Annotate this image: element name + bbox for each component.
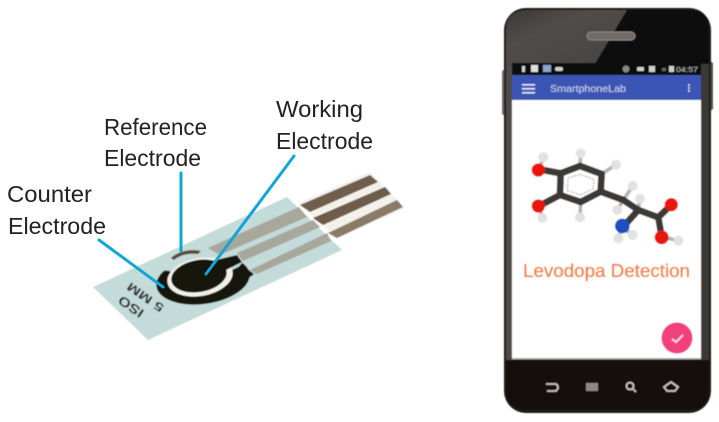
status bar — [512, 63, 701, 75]
electrode strip — [93, 172, 405, 340]
electrode contact tabs — [298, 172, 405, 238]
working electrode arm — [216, 255, 242, 272]
bottom bezel — [506, 360, 709, 410]
printed strip marks — [115, 279, 167, 321]
nav icon: search — [626, 382, 636, 392]
label: counter electrode second line: Electrode — [8, 213, 106, 239]
counter electrode arm — [232, 268, 254, 288]
pointer lines — [99, 156, 294, 287]
screen — [512, 100, 701, 359]
counter electrode ring — [156, 262, 250, 306]
pointer: counter — [99, 240, 163, 287]
levodopa molecule — [532, 148, 683, 246]
hydrogen bonds — [539, 153, 678, 241]
app title: SmartphoneLab — [550, 83, 626, 95]
speaker — [587, 32, 635, 40]
label: working electrode: Working — [276, 96, 363, 122]
nav icon: back — [546, 384, 558, 391]
hydrogen atoms — [537, 148, 683, 246]
smartphone — [502, 8, 713, 413]
phone side button right — [708, 62, 713, 110]
molecule name: Levodopa Detection — [523, 260, 690, 281]
bezel top — [506, 10, 627, 64]
pointer: working — [206, 156, 294, 274]
phone side button left — [502, 70, 508, 115]
screen bottom edge — [512, 358, 701, 360]
action button — [662, 322, 692, 354]
label: working electrode second line: Electrode — [276, 128, 373, 154]
app bar — [512, 75, 701, 100]
molecule bonds — [539, 166, 670, 237]
white gap ring — [164, 253, 236, 301]
mark: iso: ISO — [115, 292, 147, 321]
bezel left side — [506, 64, 514, 360]
check icon — [672, 335, 683, 342]
reference electrode arc — [171, 250, 201, 260]
menu icon — [522, 84, 535, 94]
strip substrate — [93, 197, 342, 340]
nav icon: home — [664, 382, 678, 391]
working electrode disc — [169, 255, 229, 297]
conductive tracks — [208, 207, 331, 274]
status time: 04:57 — [676, 65, 698, 74]
phone body — [504, 8, 711, 413]
label: reference electrode second line: Electrode — [104, 145, 201, 171]
nav icon: menu — [586, 383, 598, 391]
nitrogen atom — [615, 219, 630, 233]
oxygen atoms — [532, 163, 678, 244]
label: counter electrode: Counter — [7, 181, 92, 207]
label: reference electrode: Reference — [104, 114, 207, 140]
status icons — [522, 65, 674, 72]
inner ring — [567, 174, 594, 195]
bezel right side — [700, 64, 709, 360]
overflow menu icon — [688, 84, 690, 92]
bezel top right — [595, 10, 709, 64]
mark: size: 5 MM — [124, 279, 167, 315]
pointer: reference — [180, 173, 182, 251]
